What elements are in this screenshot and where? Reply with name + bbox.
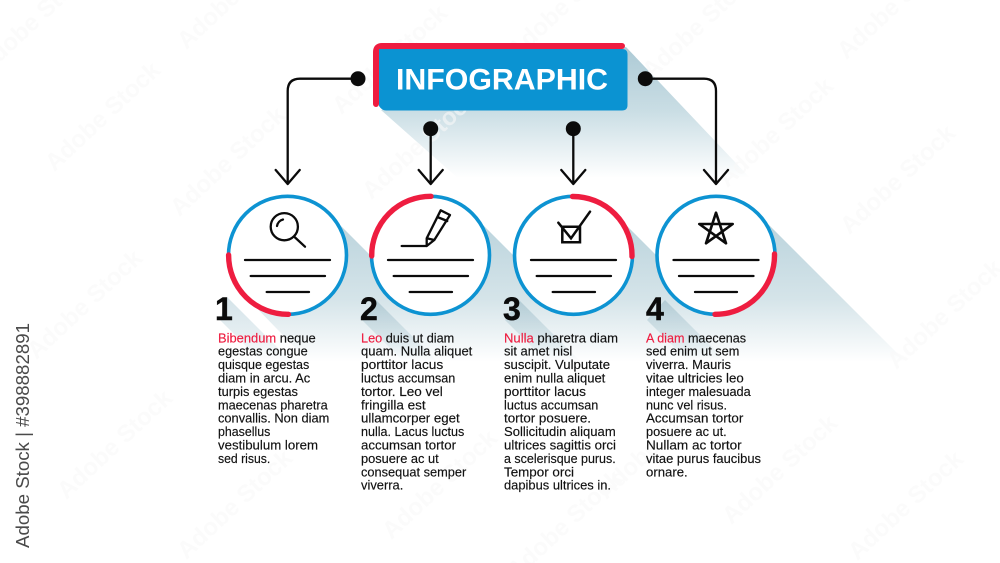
text block 4: posuere ac ut. xyxy=(646,424,727,439)
watermark pattern: Adobe Stock xyxy=(172,444,298,563)
text block 4: vitae purus faucibus xyxy=(646,451,761,466)
watermark pattern: Adobe Stock xyxy=(357,84,483,204)
text block 3: Nulla pharetra diam xyxy=(504,330,618,345)
text block 1: vestibulum lorem xyxy=(218,438,318,452)
text block 3: sit amet nisl xyxy=(504,344,572,359)
text block 2 xyxy=(361,330,473,493)
red frame xyxy=(376,46,622,104)
text block 4: ornare. xyxy=(646,464,688,479)
number 2: 2 xyxy=(360,291,378,327)
text block 1: quisque egestas xyxy=(218,357,309,372)
watermark pattern: Adobe Stock xyxy=(377,424,503,544)
watermark pattern: Adobe Stock xyxy=(22,244,148,364)
text block 3: ultrices sagittis orci xyxy=(504,438,616,452)
panel: circle 3 xyxy=(514,196,632,314)
text block 3: dapibus ultrices in. xyxy=(504,478,611,493)
text block 3: porttitor lacus xyxy=(504,384,586,399)
long shadows: circles and numbers xyxy=(220,214,906,362)
text block 3: tortor posuere. xyxy=(504,411,591,426)
panel: circle 2 xyxy=(372,196,490,314)
text block 1: phasellus xyxy=(218,424,270,439)
text block 2: Leo duis ut diam xyxy=(361,330,454,345)
text block 4: A diam maecenas xyxy=(646,330,746,345)
text block 1: sed risus. xyxy=(218,451,270,466)
text block 3 xyxy=(504,330,618,493)
text block 2: nulla. Lacus luctus xyxy=(361,424,464,439)
watermark pattern: Adobe Stock xyxy=(592,384,718,504)
text block 2: tortor. Leo vel xyxy=(361,384,443,399)
panel: circle 4 xyxy=(657,196,775,314)
title box xyxy=(376,46,628,110)
watermark pattern: Adobe Stock xyxy=(713,72,839,192)
text block 3: a scelerisque purus. xyxy=(504,451,616,466)
text block 2: luctus accumsan xyxy=(361,370,455,386)
text block 3: suscipit. Vulputate xyxy=(504,357,610,372)
text block 1: Bibendum neque xyxy=(218,330,316,345)
arrow 2 xyxy=(419,121,443,184)
watermark pattern: Adobe Stock xyxy=(843,445,969,563)
text block 2: ullamcorper eget xyxy=(361,411,460,426)
number 4: 4 xyxy=(646,291,664,327)
panel: circle 1 xyxy=(228,196,346,314)
icon: pencil xyxy=(402,210,450,246)
text block 4: sed enim ut sem xyxy=(646,344,739,359)
text block 4: vitae ultricies leo xyxy=(646,370,744,386)
text block 4: viverra. Mauris xyxy=(646,357,731,372)
text block 4 xyxy=(646,330,761,479)
watermark pattern: Adobe Stock xyxy=(327,0,453,119)
text block 3: Sollicitudin aliquam xyxy=(504,424,616,439)
icon: magnifying glass xyxy=(271,213,305,247)
number 1: 1 xyxy=(215,291,233,327)
text block 2: quam. Nulla aliquet xyxy=(361,344,473,359)
icon: checkbox xyxy=(558,212,590,242)
arrow 4 xyxy=(638,71,728,184)
icon: star xyxy=(699,213,733,243)
text block 1: diam in arcu. Ac xyxy=(218,370,311,386)
text block 3: luctus accumsan xyxy=(504,397,598,412)
text block 1: egestas congue xyxy=(218,344,308,359)
text block 2: posuere ac ut xyxy=(361,451,439,466)
text block 2: consequat semper xyxy=(361,464,467,479)
number 3: 3 xyxy=(503,291,521,327)
watermark pattern: Adobe Stock xyxy=(165,101,291,221)
arrow 1 xyxy=(276,71,366,184)
long shadow: title box xyxy=(381,47,752,180)
text block 1: maecenas pharetra xyxy=(218,397,329,412)
text block 3: enim nulla aliquet xyxy=(504,370,606,386)
text block 4: integer malesuada xyxy=(646,384,752,399)
title text: INFOGRAPHIC xyxy=(396,63,608,96)
text block 2: fringilla est xyxy=(361,397,426,412)
text block 3: Tempor orci xyxy=(504,464,574,479)
text block 4: nunc vel risus. xyxy=(646,397,727,412)
text block 4: Accumsan tortor xyxy=(646,411,744,426)
text block 2: viverra. xyxy=(361,478,403,493)
blue panel xyxy=(379,49,628,110)
text block 2: porttitor lacus xyxy=(361,357,443,372)
arrow 3 xyxy=(561,121,585,184)
watermark pattern: Adobe Stock xyxy=(40,56,166,176)
watermark pattern: Adobe Stock xyxy=(835,119,961,239)
text block 1: convallis. Non diam xyxy=(218,411,329,426)
watermark pattern: Adobe Stock xyxy=(717,409,843,529)
text block 1: turpis egestas xyxy=(218,384,298,399)
text block 2: accumsan tortor xyxy=(361,438,457,452)
text block 4: Nullam ac tortor xyxy=(646,438,742,452)
stock credit: Adobe Stock | #398882891 xyxy=(13,323,33,548)
watermark pattern: Adobe Stock xyxy=(52,384,178,504)
text block 1 xyxy=(218,330,329,466)
